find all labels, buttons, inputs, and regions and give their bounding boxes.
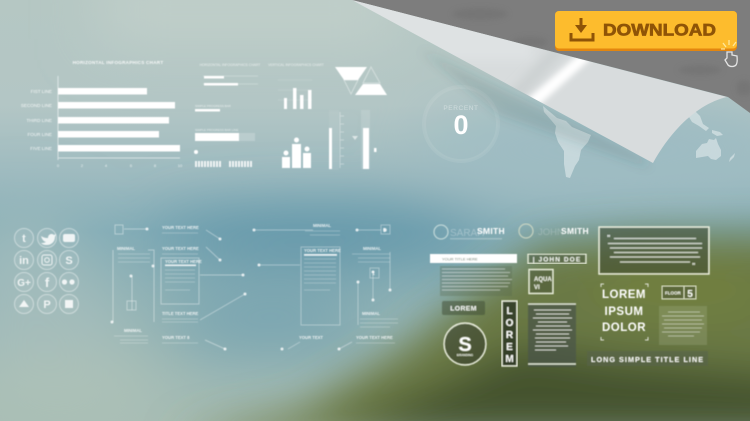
- name logos: SMITH: [561, 226, 589, 236]
- diagram labels: [117, 225, 202, 340]
- axis numbers: 0: [57, 163, 60, 168]
- chart axes: [58, 76, 180, 160]
- title bar with paragraph: YOUR TITLE HERE: [442, 256, 478, 262]
- axis numbers: [57, 163, 183, 168]
- diagram labels: [299, 223, 393, 340]
- axis numbers: 10: [178, 163, 183, 168]
- diagram labels: YOUR TEXT 8: [162, 335, 190, 340]
- diagram labels: YOUR TEXT HERE: [162, 225, 199, 230]
- axis numbers: 6: [130, 163, 133, 168]
- aqua square label: VI: [534, 285, 540, 291]
- social glyphs: in: [19, 255, 29, 267]
- vertical bar chart: [268, 63, 324, 109]
- long title line: LONG SIMPLE TITLE LINE: [591, 355, 704, 364]
- floor 5 tag: [662, 286, 696, 300]
- john doe label: | JOHN DOE: [533, 256, 581, 264]
- quote box: [599, 227, 709, 274]
- long title line: [587, 351, 708, 366]
- translucent note card: [659, 306, 707, 345]
- diagram labels: YOUR TEXT HERE: [165, 259, 202, 264]
- S circle logo: BRANDING: [457, 353, 474, 357]
- vertical lorem sign: L: [506, 306, 513, 317]
- small bar charts column: HORIZONTAL INFOGRAPHICS CHART: [200, 63, 260, 67]
- floor 5 tag: 5: [687, 289, 693, 300]
- social icons grid: [14, 228, 78, 314]
- diagram labels: MINIMAL: [363, 246, 381, 251]
- placeholder text rows: [114, 233, 198, 343]
- bar labels: FIVE LINE: [30, 146, 52, 151]
- lorem badge: LOREM: [450, 306, 477, 312]
- lorem ipsum dolor block: DOLOR: [602, 322, 646, 334]
- vertical lorem sign: E: [506, 342, 513, 353]
- pictogram column chart: [282, 138, 311, 168]
- cursor click icon: [721, 40, 737, 66]
- bar labels: [21, 89, 52, 151]
- social glyphs: f: [45, 275, 50, 290]
- vertical lorem sign: [502, 301, 517, 366]
- lorem ipsum dolor block: LOREM: [602, 289, 646, 301]
- diagram labels: YOUR TEXT HERE: [304, 248, 341, 253]
- diagram labels: MINIMAL: [313, 223, 331, 228]
- diagram labels: TITLE TEXT HERE: [162, 311, 198, 316]
- chart title: HORIZONTAL INFOGRAPHICS CHART: [73, 60, 163, 65]
- download button: [555, 11, 737, 51]
- title bar with paragraph: [430, 254, 517, 296]
- paragraph block: [528, 303, 576, 367]
- bars: [58, 88, 180, 152]
- thermometer gauge: [329, 110, 376, 170]
- bar labels: FIST LINE: [31, 89, 52, 94]
- quote box: ": [607, 235, 610, 242]
- download icon: [571, 18, 593, 40]
- axis numbers: 8: [154, 163, 157, 168]
- name logos: SARAH: [450, 228, 484, 239]
- floor 5 tag: FLOOR: [665, 290, 681, 296]
- peeled page corner: [352, 0, 727, 168]
- lorem ipsum dolor block: IPSUM: [605, 306, 643, 318]
- vertical lorem sign: R: [506, 330, 514, 341]
- lorem badge: [442, 301, 485, 315]
- diagram labels: 5: [383, 228, 386, 234]
- vertical lorem sign: O: [506, 318, 514, 329]
- social glyphs: G+: [17, 278, 31, 289]
- diagram labels: MINIMAL: [117, 246, 135, 251]
- annotated layout diagram: left: [110, 225, 246, 350]
- people pictogram rows: [195, 161, 252, 167]
- axis numbers: 2: [81, 163, 84, 168]
- diagram labels: MINIMAL: [124, 328, 142, 333]
- bar labels: THIRD LINE: [26, 118, 52, 123]
- horizontal bar chart: [21, 60, 183, 168]
- S circle logo: S: [458, 334, 472, 356]
- name logos: [434, 224, 589, 240]
- social glyphs: P: [43, 299, 51, 311]
- annotated layout diagram: right: [252, 223, 398, 350]
- triangle funnel: [335, 67, 387, 95]
- social glyphs: S: [65, 255, 73, 267]
- small bar charts column: [194, 63, 260, 167]
- lorem ipsum dolor block: [601, 284, 648, 340]
- vertical bar chart: VERTICAL INFOGRAPHICS CHART: [268, 63, 324, 67]
- social glyphs: t: [22, 233, 26, 245]
- diagram labels: MINIMAL: [362, 311, 380, 316]
- grey page underneath: [352, 0, 750, 113]
- diagram labels: 1: [372, 271, 375, 277]
- name logos: JOHN: [538, 227, 564, 238]
- axis numbers: 4: [105, 163, 108, 168]
- percent label: PERCENT: [443, 105, 479, 112]
- percent value: 0: [453, 110, 469, 140]
- john doe label: [528, 254, 586, 264]
- small bar charts column: SIMPLE PROGRESS BAR: [195, 104, 232, 108]
- placeholder text rows: [304, 231, 398, 343]
- social glyphs: [17, 233, 73, 311]
- small bar charts column: SIMPLE PROGRESS BAR LINE: [195, 128, 238, 132]
- name logos: SMITH: [477, 226, 505, 236]
- button label: DOWNLOAD: [603, 20, 716, 40]
- aqua square label: [529, 270, 553, 294]
- world map fragments: [543, 106, 735, 178]
- S circle logo: [444, 323, 486, 365]
- quote box: ": [692, 263, 695, 270]
- diagram labels: YOUR TEXT HERE: [356, 335, 393, 340]
- vertical lorem sign: M: [505, 354, 514, 365]
- percent dial: [424, 87, 498, 161]
- bar labels: SECOND LINE: [21, 103, 52, 108]
- diagram labels: YOUR TEXT HERE: [162, 246, 199, 251]
- diagram labels: YOUR TEXT: [299, 335, 323, 340]
- aqua square label: AQUA: [534, 277, 552, 283]
- bar labels: FOUR LINE: [27, 132, 52, 137]
